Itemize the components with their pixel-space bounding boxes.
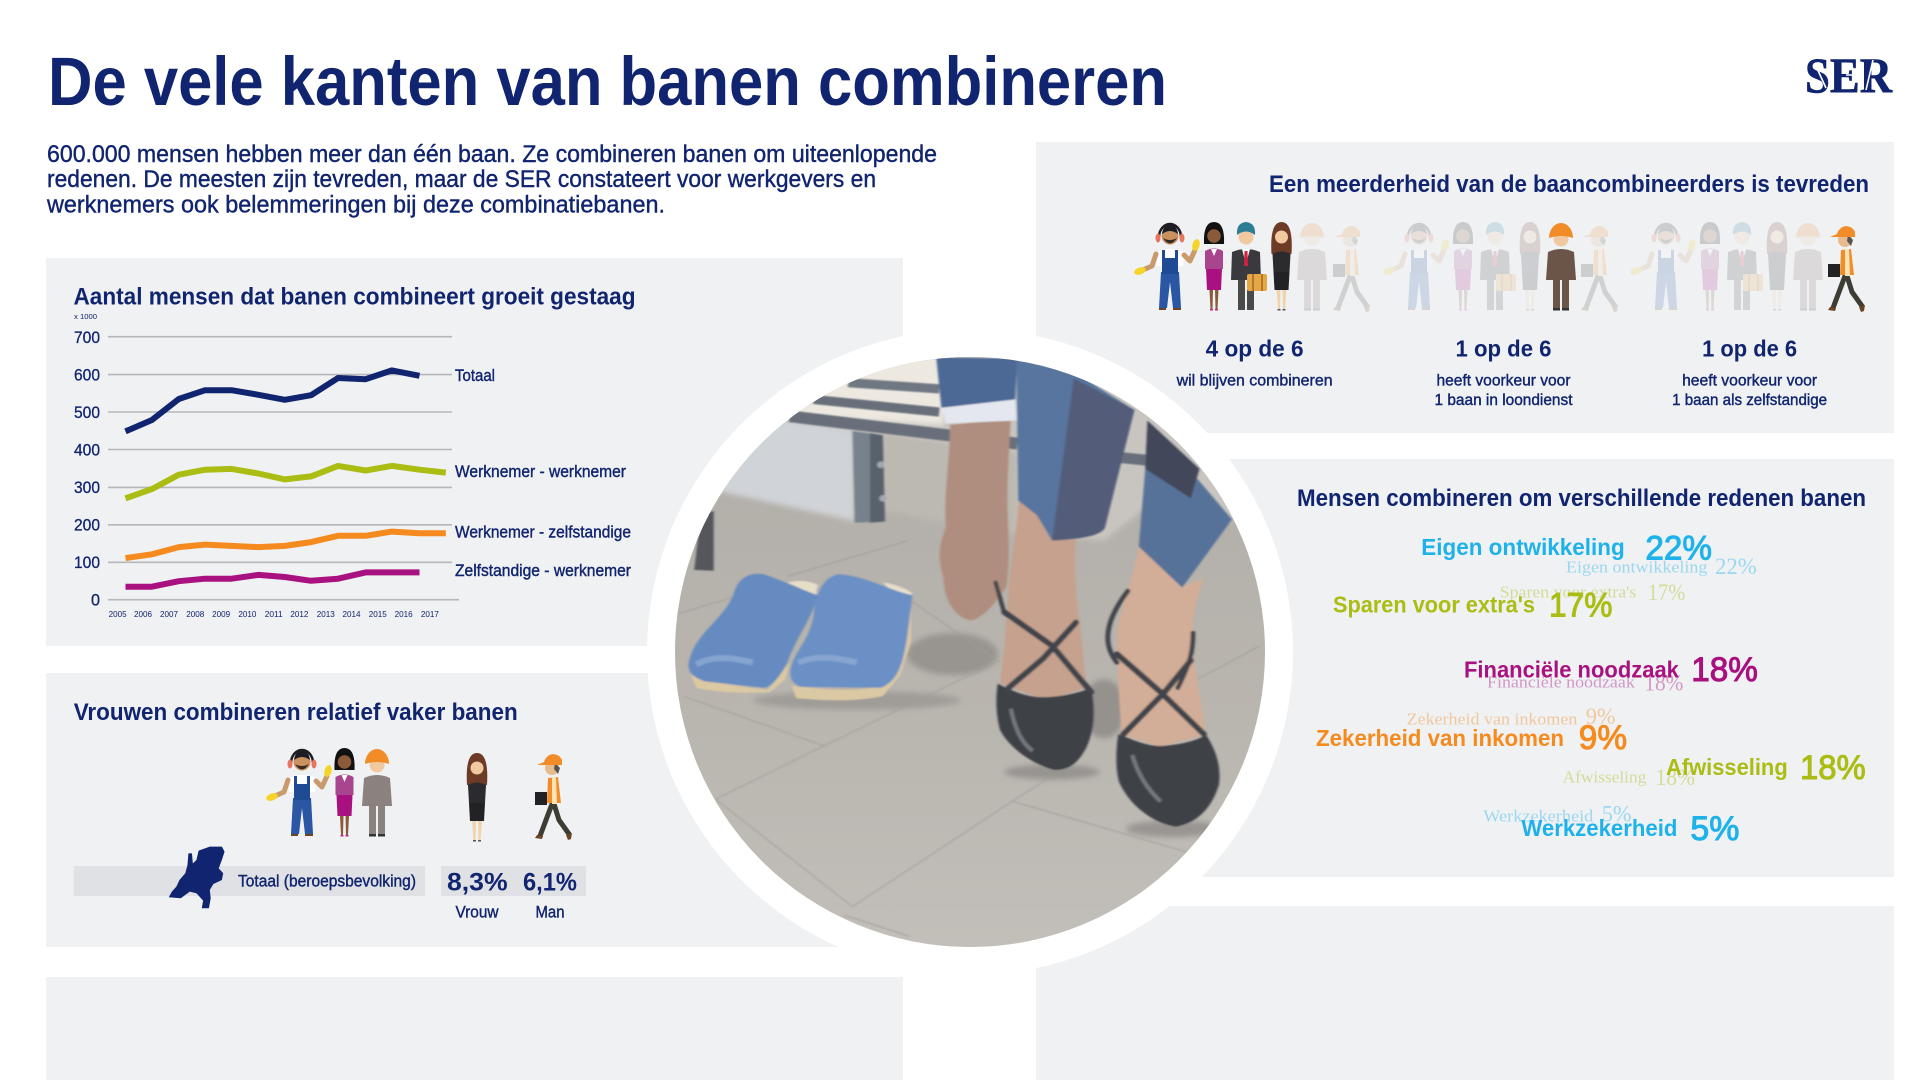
icons: row 1, 4 of 6 xyxy=(1133,222,1370,312)
intro text xyxy=(46,141,937,218)
panel: vrouwen en mannen xyxy=(74,699,586,922)
x axis labels: 2009 xyxy=(212,609,230,619)
panel: line chart xyxy=(74,284,636,619)
ghost labels: 5% xyxy=(1602,802,1632,827)
reason: zekerheid van inkomen xyxy=(1316,719,1627,757)
stat: 1 op de 6 zelfstandige: heeft voorkeur voor xyxy=(1682,373,1818,390)
x axis labels: 2016 xyxy=(395,609,413,619)
label: vrouw: Vrouw xyxy=(456,903,499,922)
icon: map of the Netherlands xyxy=(169,847,225,908)
series labels: Zelfstandige - werknemer xyxy=(455,561,631,580)
series labels: Werknemer - werknemer xyxy=(455,462,626,481)
reason: financiele noodzaak: Financiële noodzaak xyxy=(1464,656,1679,682)
heading: tevreden: Een meerderheid van de baancombineerders is tevreden xyxy=(1269,171,1869,198)
stat: 4 op de 6: 4 op de 6 xyxy=(1206,336,1304,362)
value: vrouw: 8,3% xyxy=(447,869,508,897)
x axis labels: 2005 xyxy=(109,609,127,619)
x axis labels: 2012 xyxy=(290,609,309,619)
value: man: 6,1% xyxy=(523,869,577,897)
y axis labels: 200 xyxy=(74,516,100,534)
stat: 4 op de 6: wil blijven combineren xyxy=(1176,373,1333,390)
ghost labels: 22% xyxy=(1715,554,1757,579)
intro text: werknemers ook belemmeringen bij deze combinatiebanen. xyxy=(46,192,665,218)
stat: 1 op de 6 zelfstandige: 1 op de 6 xyxy=(1702,336,1797,362)
stat: 1 op de 6 loondienst xyxy=(1434,336,1573,409)
x axis labels: 2010 xyxy=(238,609,257,619)
ghost labels: Eigen ontwikkeling xyxy=(1566,558,1708,577)
series labels: Totaal xyxy=(455,366,495,385)
reason: sparen voor extra's: Sparen voor extra's xyxy=(1333,592,1535,618)
reason: financiele noodzaak xyxy=(1464,651,1758,689)
ghost labels: 18% xyxy=(1644,671,1683,696)
x axis labels: 2013 xyxy=(317,609,335,619)
heading: vrouwen: Vrouwen combineren relatief vaker banen xyxy=(74,699,518,726)
ghost labels: Zekerheid van inkomen xyxy=(1407,709,1578,728)
series: totaal xyxy=(126,370,420,431)
y axis labels: 700 xyxy=(74,328,100,347)
logo: SER: SER xyxy=(1805,47,1893,103)
panel: redenen xyxy=(1297,485,1866,848)
reason: werkzekerheid: 5% xyxy=(1690,810,1739,848)
reason: eigen ontwikkeling: 22% xyxy=(1645,529,1712,567)
photo wash xyxy=(688,358,1232,834)
bar: totaal xyxy=(74,866,425,896)
series labels xyxy=(455,366,631,580)
y axis labels: 500 xyxy=(74,403,100,422)
intro text: 600.000 mensen hebben meer dan één baan. Ze combineren banen om uiteenlopende xyxy=(47,141,937,168)
title: De vele kanten van banen combineren xyxy=(48,43,1167,120)
chart unit: x 1000 xyxy=(74,314,97,321)
series: werknemer-zelfstandige xyxy=(126,532,446,558)
stat: 1 op de 6 loondienst: heeft voorkeur voor xyxy=(1436,373,1571,390)
x axis labels: 2006 xyxy=(134,609,152,619)
heading: chart: Aantal mensen dat banen combineert groeit gestaag xyxy=(74,284,636,310)
ghost labels: Financiële noodzaak xyxy=(1487,672,1635,691)
heading: redenen: Mensen combineren om verschillende redenen banen xyxy=(1297,485,1866,512)
x axis labels: 2007 xyxy=(160,609,178,619)
y axis labels: 300 xyxy=(74,478,100,497)
y axis labels xyxy=(74,328,100,610)
stat: 1 op de 6 loondienst: 1 baan in loondienst xyxy=(1434,392,1573,409)
x axis labels: 2017 xyxy=(421,609,439,619)
photo ring xyxy=(647,329,1293,975)
reason: eigen ontwikkeling: Eigen ontwikkeling xyxy=(1421,534,1625,560)
ghost labels: Werkzekerheid xyxy=(1483,807,1594,826)
y axis labels: 400 xyxy=(74,440,100,460)
stat: 4 op de 6 xyxy=(1176,336,1333,390)
panel: tevreden xyxy=(1133,171,1869,409)
x axis labels xyxy=(109,609,439,619)
x axis labels: 2011 xyxy=(265,609,283,619)
photo: woman changing shoes xyxy=(675,357,1265,947)
ghost labels xyxy=(1407,554,1757,827)
reason: sparen voor extra's: 17% xyxy=(1549,587,1612,625)
bar: percentages xyxy=(441,866,586,896)
stat: 1 op de 6 zelfstandige xyxy=(1672,336,1827,409)
icons: row 2, 1 of 6 xyxy=(1382,222,1618,312)
icon: vrouw xyxy=(467,753,487,842)
reason: werkzekerheid: Werkzekerheid xyxy=(1521,815,1677,841)
y axis labels: 100 xyxy=(74,553,100,572)
icon: beroepsbevolking figures xyxy=(265,748,392,836)
x axis labels: 2014 xyxy=(342,609,361,619)
reason: sparen voor extra's xyxy=(1333,587,1612,625)
y axis labels: 600 xyxy=(74,366,100,384)
series labels: Werknemer - zelfstandige xyxy=(455,522,631,542)
reason: zekerheid van inkomen: 9% xyxy=(1579,719,1627,757)
ghost labels: Sparen voor extra's xyxy=(1500,583,1636,602)
series: werknemer-werknemer xyxy=(126,466,446,498)
ghost labels: Afwisseling xyxy=(1563,767,1647,786)
x axis labels: 2015 xyxy=(369,609,387,619)
reason: afwisseling: Afwisseling xyxy=(1666,754,1788,780)
icons: row 3, 1 of 6 xyxy=(1629,222,1865,312)
icon: man xyxy=(535,754,572,840)
reason: financiele noodzaak: 18% xyxy=(1691,651,1758,689)
reason: werkzekerheid xyxy=(1521,810,1739,848)
label: totaal: Totaal (beroepsbevolking) xyxy=(238,872,416,891)
reason: zekerheid van inkomen: Zekerheid van inkomen xyxy=(1316,725,1564,751)
reason: eigen ontwikkeling xyxy=(1421,529,1712,567)
reason: afwisseling: 18% xyxy=(1800,749,1866,787)
ghost labels: 18% xyxy=(1656,765,1695,790)
stat: 1 op de 6 zelfstandige: 1 baan als zelfstandige xyxy=(1672,392,1827,409)
intro text: redenen. De meesten zijn tevreden, maar de SER constateert voor werkgevers en xyxy=(47,166,876,193)
y axis labels: 0 xyxy=(91,590,100,610)
x axis labels: 2008 xyxy=(186,609,205,619)
series: zelfstandige-werknemer xyxy=(126,572,420,587)
reason: afwisseling xyxy=(1666,749,1866,787)
stat: 1 op de 6 loondienst: 1 op de 6 xyxy=(1456,336,1552,362)
ghost labels: 17% xyxy=(1648,580,1685,605)
label: man: Man xyxy=(536,903,564,922)
ghost labels: 9% xyxy=(1586,704,1616,729)
